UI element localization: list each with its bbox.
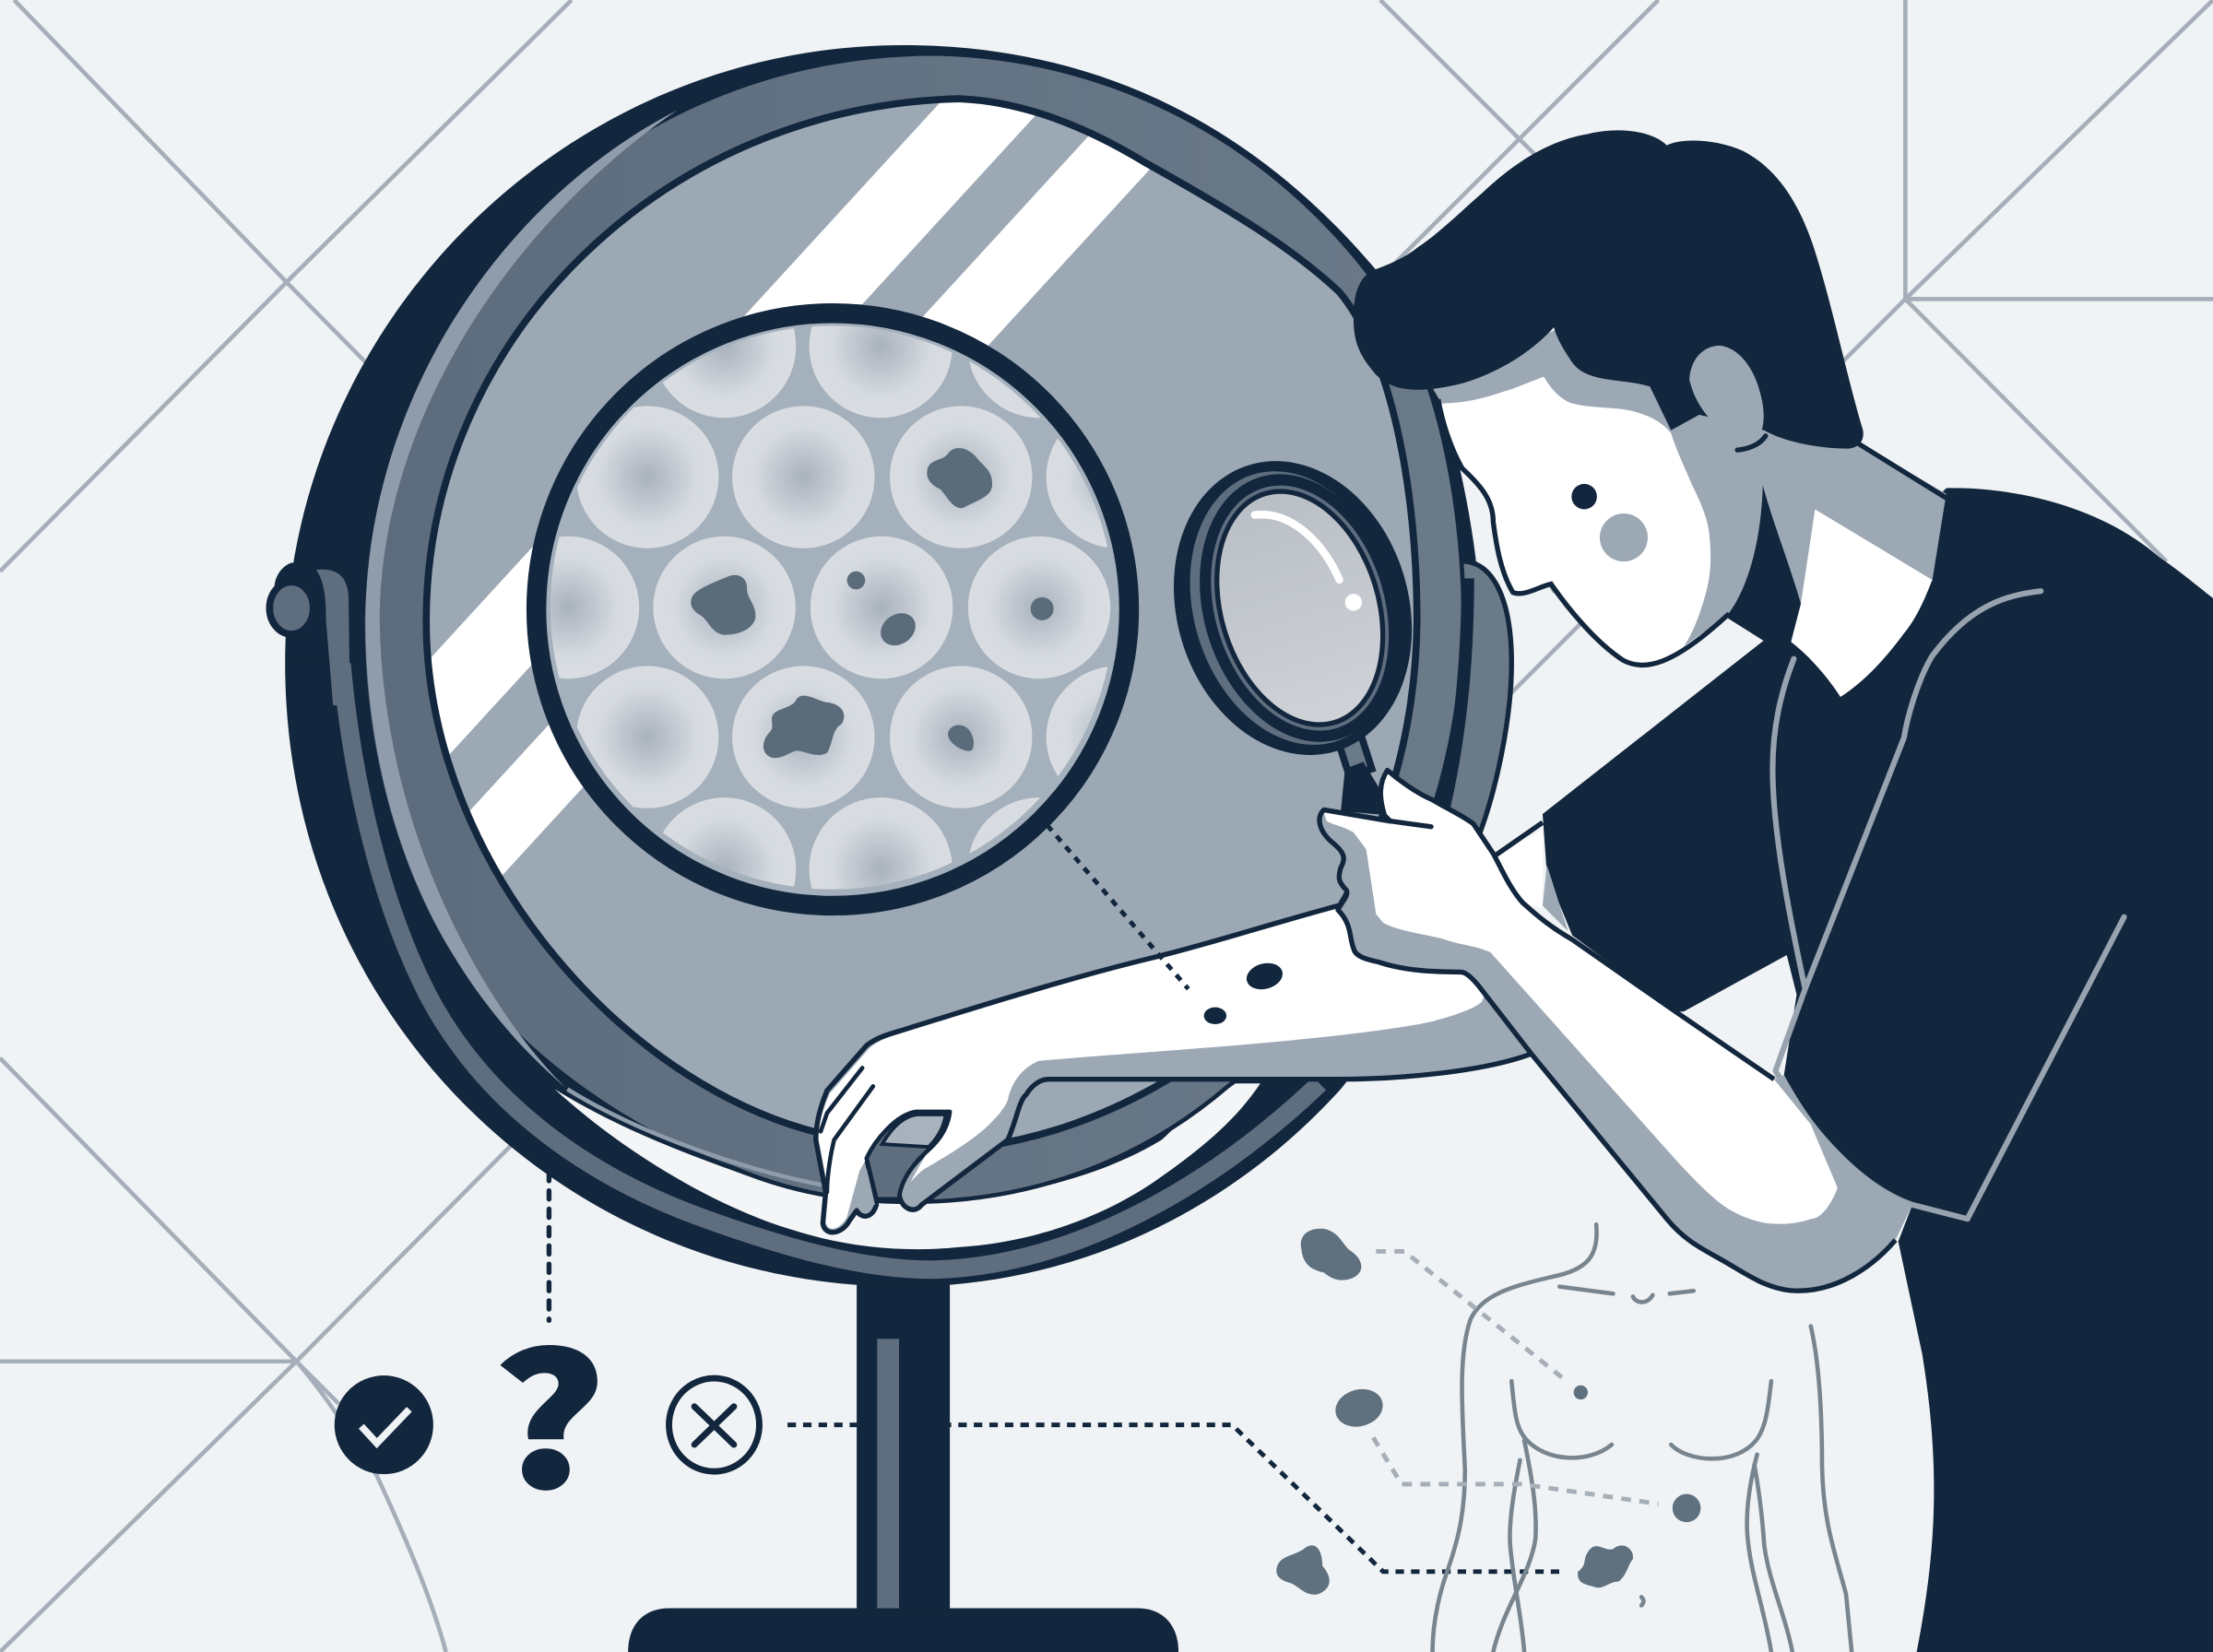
ear line bbox=[1737, 436, 1766, 450]
lens highlight arc bbox=[1255, 514, 1340, 580]
mirror bbox=[128, 45, 1511, 1287]
torso outline diagram bbox=[1433, 1224, 1852, 1652]
neck and skin shadow bbox=[1433, 324, 1947, 650]
arm shadow base bbox=[816, 905, 1532, 1233]
left pivot bracket bbox=[274, 560, 354, 663]
handle grip bbox=[1341, 761, 1391, 816]
inspected arm bbox=[816, 905, 1532, 1233]
arm white skin bbox=[819, 909, 1496, 1229]
mirror outer frame bbox=[285, 45, 1482, 1287]
hair bbox=[1354, 130, 1864, 449]
stand pole bbox=[857, 1277, 950, 1615]
shirt seam lines bbox=[1772, 591, 2124, 1219]
cell grid bbox=[550, 325, 1110, 890]
mirror glass bbox=[426, 99, 1417, 1150]
arm mole large bbox=[1244, 960, 1285, 993]
lens background bbox=[543, 320, 1122, 899]
sleeve inner shade bbox=[1543, 865, 1568, 931]
ear bbox=[1689, 346, 1764, 449]
outer frame band bbox=[337, 572, 1320, 1269]
handheld magnifying glass bbox=[1139, 431, 1448, 816]
shirt collar wedge bbox=[1727, 485, 1801, 646]
lens highlight dot bbox=[1345, 594, 1362, 611]
man bbox=[1354, 130, 2213, 1652]
cheek bbox=[1600, 513, 1648, 561]
face outline bbox=[1438, 399, 1766, 665]
dashed mole connectors bbox=[1373, 1251, 1658, 1504]
outer ring bbox=[1139, 431, 1448, 785]
mirror rim bbox=[362, 53, 1463, 1202]
lens ring bbox=[537, 313, 1129, 905]
white sliver near sleeve bbox=[1497, 830, 1543, 909]
rim right dark stripe bbox=[1439, 578, 1468, 825]
mirror stand bbox=[628, 1277, 1178, 1652]
finger lines bbox=[821, 1068, 873, 1192]
arm mole small bbox=[1204, 1008, 1226, 1024]
dotted line from lens to arm mole bbox=[1047, 825, 1189, 989]
window between fingers bbox=[867, 1112, 950, 1199]
back rim bbox=[1157, 445, 1431, 771]
neck outline bbox=[1857, 443, 1947, 498]
lens glass bbox=[1193, 474, 1407, 742]
icon: check mark bbox=[335, 1375, 433, 1474]
lens inner edge bbox=[1187, 467, 1414, 749]
icon: question mark: ? bbox=[491, 1277, 606, 1540]
inner ring bbox=[1168, 449, 1432, 767]
metal ring bbox=[1182, 463, 1417, 753]
stand base bbox=[628, 1609, 1178, 1652]
shirt bbox=[1543, 488, 2213, 1652]
bracket inner bbox=[316, 570, 350, 705]
glass reflections bbox=[432, 102, 1150, 876]
rim light edge crescent bbox=[365, 110, 678, 1089]
right pivot bracket bbox=[1439, 561, 1511, 835]
small finger fill bbox=[861, 1168, 875, 1208]
rim light edge lower line bbox=[567, 1089, 846, 1189]
white collar bbox=[1791, 509, 1932, 697]
arm shadow bbox=[1320, 771, 1912, 1291]
pole highlight bbox=[877, 1339, 899, 1609]
left pivot knob bbox=[269, 582, 314, 634]
arm white skin bbox=[1324, 771, 1838, 1224]
holding arm and hand bbox=[1320, 771, 1912, 1291]
sleeve strap line bbox=[1496, 822, 1543, 855]
dotted line from check area up to mirror bbox=[548, 1154, 550, 1320]
pale crescent gap bbox=[555, 1083, 1260, 1249]
eye bbox=[1571, 484, 1597, 509]
dotted line from cross icon to moles bbox=[787, 1425, 1559, 1572]
body moles bbox=[1276, 1229, 1700, 1595]
large magnified lens circle with skin cells bbox=[526, 303, 1140, 916]
finger line bbox=[1391, 821, 1431, 827]
face bbox=[1441, 377, 1710, 667]
arm and hand outline bbox=[1320, 771, 1896, 1291]
window upper glass bbox=[882, 1115, 946, 1147]
handle collar bbox=[1338, 734, 1372, 776]
glass outline bbox=[426, 99, 1417, 1150]
icon: cross in circle bbox=[669, 1378, 759, 1471]
